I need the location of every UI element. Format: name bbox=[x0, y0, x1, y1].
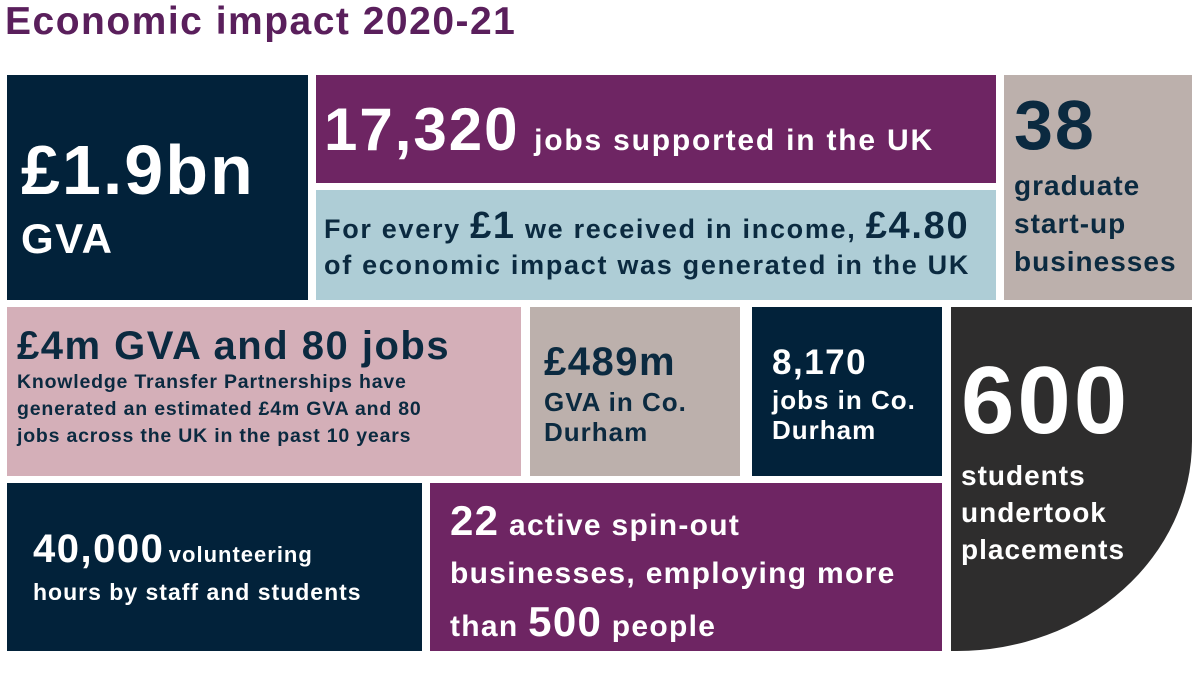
title: Economic impact 2020-21 bbox=[5, 0, 516, 43]
panel: 8,170 bbox=[752, 307, 942, 476]
panel: volunteering bbox=[7, 483, 422, 651]
panel: KTP: jobs across the UK in the past 10 years bbox=[17, 425, 411, 447]
panel: 8,170: 8,170 bbox=[772, 343, 867, 382]
panel: 8,170: jobs in Co. bbox=[772, 385, 916, 415]
panel: £489m: Durham bbox=[544, 417, 648, 447]
panel: spin-outs: than 500 people bbox=[450, 598, 716, 645]
panel: KTP: generated an estimated £4m GVA and 80 bbox=[17, 398, 422, 420]
panel: jobs supported: 17,320 jobs supported in the UK bbox=[324, 96, 934, 163]
panel: 38 start-ups: 38 bbox=[1014, 86, 1096, 164]
panel: GVA bbox=[7, 75, 308, 300]
panel: GVA: £1.9bn bbox=[21, 131, 255, 209]
panel: 38 start-ups: graduate bbox=[1014, 170, 1140, 201]
panel: every £1: of economic impact was generated in the UK bbox=[324, 250, 970, 280]
panel: every £1 bbox=[316, 190, 996, 300]
panel: 8,170: Durham bbox=[772, 415, 876, 445]
panel: 38 start-ups: businesses bbox=[1014, 246, 1177, 277]
panel: £489m: £489m bbox=[544, 340, 676, 384]
panel: KTP: Knowledge Transfer Partnerships have bbox=[17, 371, 407, 393]
panel: 600 placements: undertook bbox=[961, 497, 1107, 528]
panel: volunteering: hours by staff and students bbox=[33, 579, 362, 605]
panel: 600 placements bbox=[951, 307, 1192, 651]
panel: 600 placements: students bbox=[961, 460, 1086, 491]
panel: every £1: For every £1 we received in income, £4.80 bbox=[324, 205, 969, 247]
panel: KTP: £4m GVA and 80 jobs bbox=[17, 324, 450, 368]
panel: spin-outs: 22 active spin-out bbox=[450, 497, 740, 544]
panel: £489m: GVA in Co. bbox=[544, 387, 687, 417]
panel: volunteering: 40,000 volunteering bbox=[33, 527, 313, 571]
panel: spin-outs: businesses, employing more bbox=[450, 557, 896, 590]
panel: £489m bbox=[530, 307, 740, 476]
panel: GVA: GVA bbox=[21, 215, 113, 262]
panel: 38 start-ups bbox=[1004, 75, 1192, 300]
panel: spin-outs bbox=[430, 483, 942, 651]
panel: jobs supported bbox=[316, 75, 996, 183]
panel: KTP bbox=[7, 307, 521, 476]
panel: 600 placements: placements bbox=[961, 534, 1125, 565]
panel: 600 placements: 600 bbox=[961, 347, 1130, 454]
panel: 38 start-ups: start-up bbox=[1014, 208, 1126, 239]
